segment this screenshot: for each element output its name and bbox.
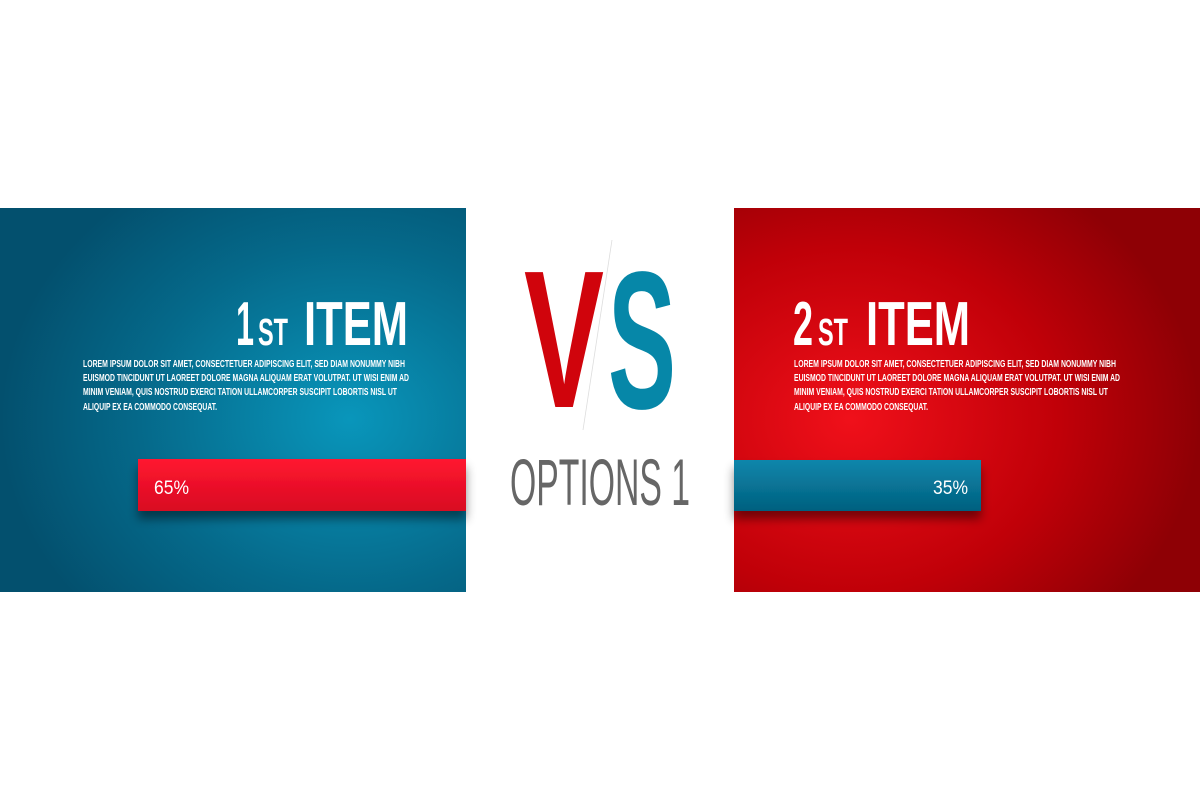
heading: 2st item: 2 [793, 290, 813, 359]
text block: right description [794, 359, 1120, 413]
panel: right item [734, 208, 1200, 592]
heading: 1st item [236, 290, 408, 359]
text block: left description: MINIM VENIAM, QUIS NOSTRUD EXERCI TATION ULLAMCORPER SUSCIPIT LOBORTIS NISL UT [83, 387, 397, 398]
heading: 2st item: ITEM [866, 290, 970, 359]
heading: 2st item [793, 290, 970, 359]
heading: 1st item: ST [258, 312, 288, 354]
bar: 65%: 65% [154, 478, 189, 499]
text block: left description: EUISMOD TINCIDUNT UT LAOREET DOLORE MAGNA ALIQUAM ERAT VOLUTPAT. UT WISI ENIM AD [83, 373, 409, 384]
text block: left description [83, 359, 409, 413]
vs emblem [524, 230, 676, 450]
heading: 1st item: 1 [236, 290, 254, 359]
bar: 65% [138, 459, 466, 511]
letter S: S [608, 231, 676, 450]
letter V: V [524, 230, 604, 449]
bar: 35% [734, 460, 981, 511]
text block: left description: LOREM IPSUM DOLOR SIT AMET, CONSECTETUER ADIPISCING ELIT, SED DIAM NONUMMY NIBH [83, 359, 405, 370]
heading: 2st item: ST [818, 312, 848, 354]
heading: 1st item: ITEM [304, 290, 408, 359]
subtitle: options 1: OPTIONS 1 [510, 445, 690, 519]
text block: right description: ALIQUIP EX EA COMMODO CONSEQUAT. [794, 402, 928, 413]
bar: 35%: 35% [933, 478, 968, 499]
panel: left item [0, 208, 466, 592]
text block: left description: ALIQUIP EX EA COMMODO CONSEQUAT. [83, 402, 217, 413]
